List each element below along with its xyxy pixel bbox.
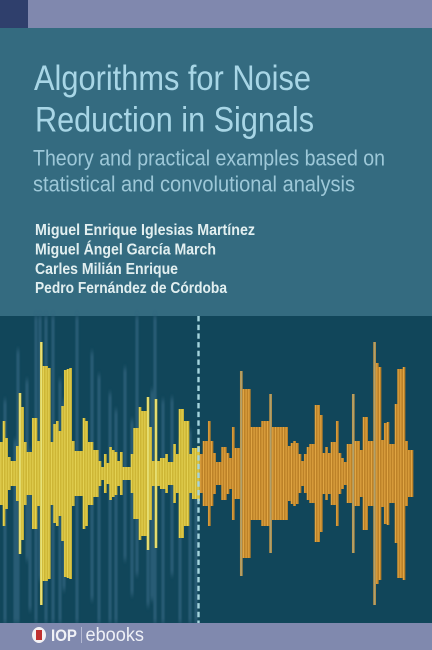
title (34, 59, 314, 140)
title: Reduction in Signals (35, 100, 314, 140)
faint background signal (5, 316, 196, 623)
authors (35, 222, 255, 297)
authors: Pedro Fernández de Córdoba (35, 280, 227, 297)
orange waveform (201, 342, 412, 605)
publisher logo (32, 625, 144, 646)
authors: Carles Milián Enrique (35, 261, 178, 278)
waveform panel (0, 316, 432, 623)
yellow waveform (1, 342, 199, 605)
title panel (0, 28, 432, 316)
logo separator (81, 627, 82, 643)
subtitle (33, 146, 385, 196)
dashed divider line (197, 316, 200, 623)
title: Algorithms for Noise (34, 59, 311, 98)
icon: IOP circle (32, 627, 46, 643)
subtitle: Theory and practical examples based on (33, 146, 385, 170)
authors: Miguel Ángel García March (35, 240, 216, 258)
subtitle: statistical and convolutional analysis (33, 172, 355, 196)
ebooks wordmark: ebooks (86, 625, 144, 646)
top-left dark square (0, 0, 28, 28)
authors: Miguel Enrique Iglesias Martínez (35, 222, 255, 239)
bottom band (0, 623, 432, 650)
IOP wordmark: IOP (51, 627, 77, 645)
top band (0, 0, 432, 28)
